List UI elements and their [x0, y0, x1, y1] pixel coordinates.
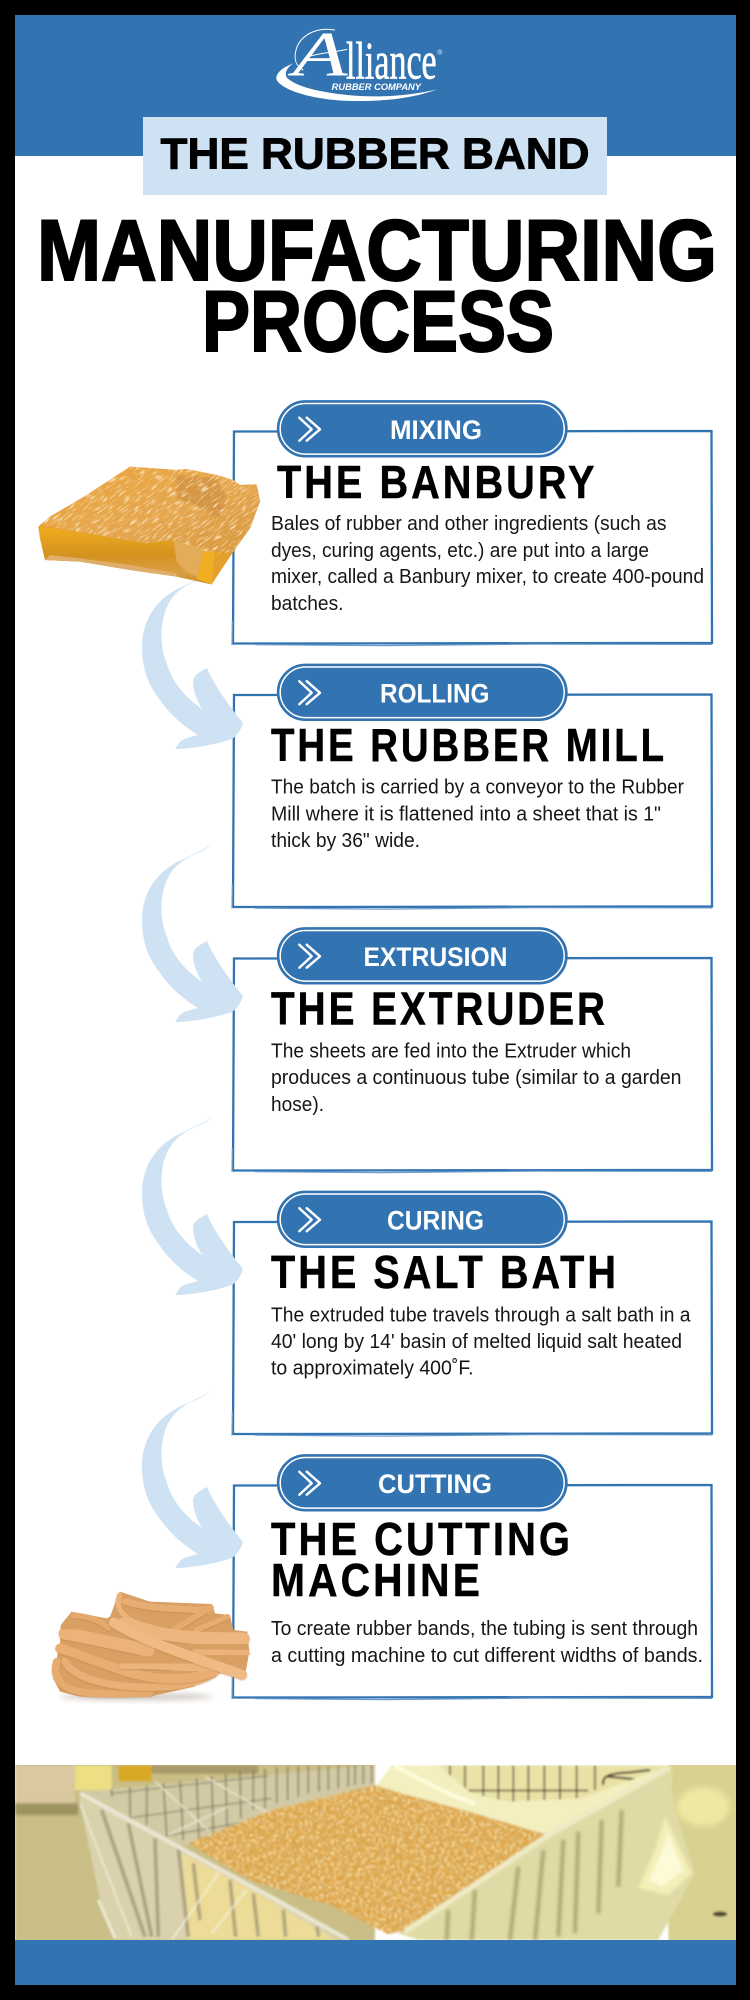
- header band: [15, 15, 736, 156]
- text: the cutting machine: [271, 1618, 703, 1667]
- heading: the cutting machine: THE CUTTING: [271, 1513, 573, 1565]
- text: the salt bath: to approximately 400˚F.: [271, 1358, 474, 1380]
- panel: cutting: [232, 1455, 712, 1700]
- logo: Alliance Rubber Company: ®: [437, 48, 442, 56]
- pill: rolling: ROLLING: [380, 678, 490, 708]
- text: the cutting machine: a cutting machine to cut different widths of bands.: [271, 1645, 703, 1667]
- arrow: extrusion to curing: [142, 1117, 243, 1295]
- text: the banbury: mixer, called a Banbury mixer, to create 400-pound: [271, 566, 704, 588]
- pill: rolling: [278, 664, 567, 720]
- pill: extrusion: EXTRUSION: [364, 942, 508, 972]
- logo: Alliance Rubber Company: lliance: [346, 32, 437, 90]
- pill: mixing: MIXING: [390, 415, 482, 445]
- heading: the cutting machine: [271, 1513, 573, 1606]
- arrow: mixing to rolling: [142, 571, 243, 749]
- text: the extruder: produces a continuous tube (similar to a garden: [271, 1067, 682, 1089]
- text: the salt bath: The extruded tube travels through a salt bath in a: [271, 1304, 691, 1326]
- pile of rubber bands: [180, 1780, 555, 1940]
- arrow: rolling to extrusion: [142, 844, 243, 1022]
- footer band: [15, 1940, 736, 1985]
- pill: mixing: [278, 401, 567, 457]
- text: the extruder: hose).: [271, 1094, 324, 1116]
- pill: cutting: [278, 1455, 567, 1511]
- text: the banbury: Bales of rubber and other ingredients (such as: [271, 513, 666, 535]
- image: rubber bands: [53, 1592, 249, 1700]
- text: the banbury: [271, 513, 704, 615]
- heading: the rubber mill: THE RUBBER MILL: [271, 719, 667, 771]
- heading: the cutting machine: MACHINE: [271, 1554, 483, 1606]
- text: the salt bath: [271, 1304, 691, 1380]
- arrow: curing to cutting: [142, 1390, 243, 1568]
- text: the salt bath: 40' long by 14' basin of melted liquid salt heated: [271, 1331, 682, 1353]
- main title: PROCESS: [202, 274, 554, 370]
- left panel of bin: [80, 1793, 348, 1940]
- text: the rubber mill: [271, 776, 684, 852]
- pill: cutting: CUTTING: [378, 1469, 492, 1499]
- right background: [375, 1760, 742, 1947]
- heading: the salt bath: THE SALT BATH: [271, 1246, 619, 1298]
- text: the banbury: dyes, curing agents, etc.) are put into a large: [271, 540, 649, 562]
- text: the rubber mill: thick by 36" wide.: [271, 830, 420, 852]
- subtitle box: The Rubber Band: THE RUBBER BAND: [160, 130, 590, 179]
- subtitle box: The Rubber Band: [143, 117, 607, 195]
- pill: curing: CURING: [387, 1206, 484, 1236]
- left background: [15, 1760, 375, 1947]
- text: the cutting machine: To create rubber bands, the tubing is sent through: [271, 1618, 698, 1640]
- logo: Alliance Rubber Company: [276, 19, 442, 101]
- image: factory bin of rubber bands: [15, 1760, 742, 1947]
- panel: rolling: [232, 664, 712, 909]
- text: the rubber mill: Mill where it is flattened into a sheet that is 1": [271, 804, 661, 826]
- logo: Alliance Rubber Company: RUBBER COMPANY: [332, 82, 422, 92]
- panel: extrusion: [232, 928, 712, 1173]
- text: the rubber mill: The batch is carried by a conveyor to the Rubber: [271, 776, 684, 798]
- heading: the extruder: THE EXTRUDER: [271, 982, 608, 1034]
- text: the extruder: [271, 1040, 682, 1116]
- image: rubber bale: [38, 466, 260, 584]
- text: the extruder: The sheets are fed into the Extruder which: [271, 1040, 631, 1062]
- panel: curing: [232, 1191, 712, 1436]
- right panel of bin: [398, 1767, 727, 1940]
- logo: Alliance Rubber Company: A: [287, 19, 348, 89]
- pill: extrusion: [278, 928, 567, 984]
- main title: [37, 203, 717, 370]
- panel: mixing: [232, 401, 712, 646]
- heading: the banbury: THE BANBURY: [277, 456, 598, 508]
- pill: curing: [278, 1191, 567, 1247]
- text: the banbury: batches.: [271, 593, 344, 615]
